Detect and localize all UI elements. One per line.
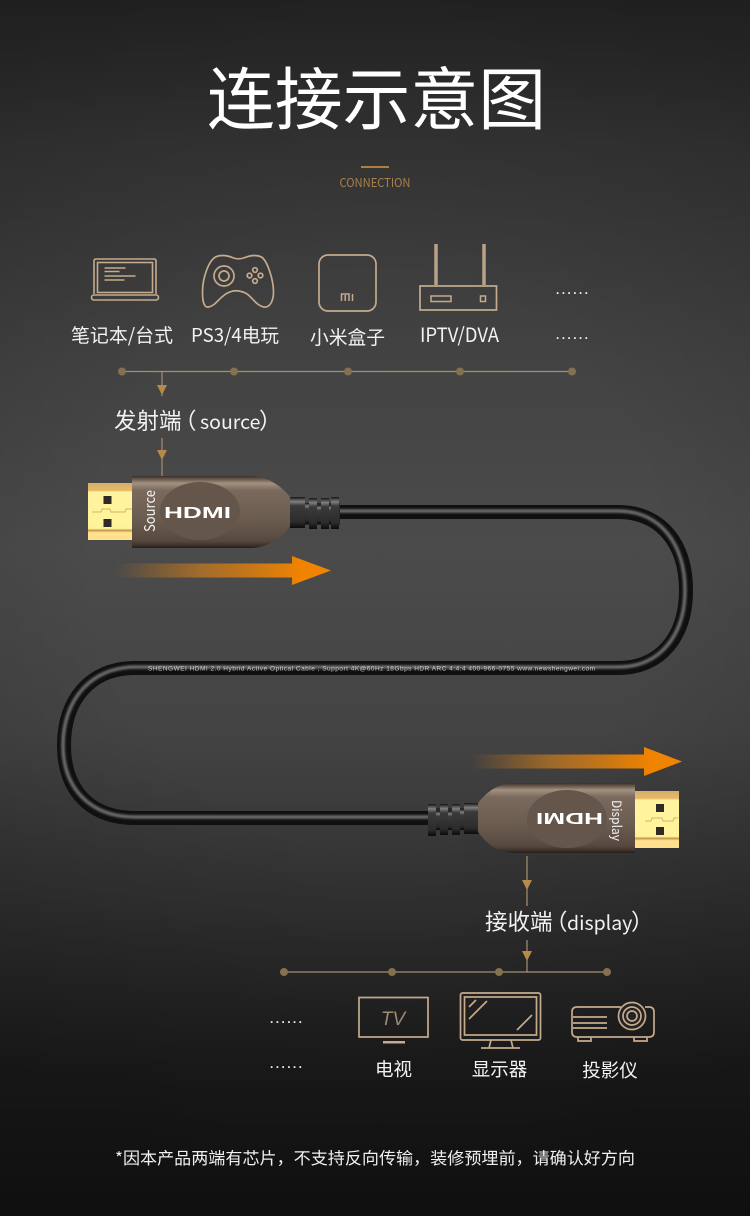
- label: HDMI logo: HDMI: [164, 505, 231, 522]
- icon: monitor: [460, 993, 540, 1048]
- label: Display: Display: [608, 800, 627, 841]
- display HDMI plug: [428, 783, 679, 853]
- label: mi box: 小米盒子: [310, 323, 385, 350]
- label: display: 接收端: [485, 905, 553, 937]
- cable: [63, 511, 686, 818]
- boot: [428, 803, 480, 836]
- icon: TV: [359, 998, 428, 1044]
- label: dots: ......: [556, 328, 588, 342]
- arrow: display direction: [470, 747, 682, 776]
- icon: mi box: [319, 255, 376, 311]
- panel: display devices: [270, 993, 654, 1083]
- title: 连接示意图: [207, 45, 546, 144]
- panel: source devices: [71, 244, 588, 350]
- label: IPTV/DVA: IPTV/DVA: [420, 319, 500, 348]
- icon: game controller: [202, 255, 274, 307]
- subtitle: connection: CONNECTION: [340, 174, 410, 191]
- label: TV: 电视: [375, 1056, 412, 1082]
- display connector line: [280, 856, 611, 976]
- label: source: ）: [259, 404, 282, 436]
- label: dots: ......: [270, 1057, 302, 1071]
- subtitle: connection: [340, 166, 410, 191]
- source connector line: [118, 368, 576, 476]
- label: monitor: 显示器: [472, 1056, 527, 1082]
- gold tip: [88, 483, 132, 540]
- icon: dots: ......: [556, 283, 588, 297]
- label: source: source: [200, 406, 260, 435]
- label: source: 发射端: [114, 404, 182, 436]
- shell: [478, 783, 635, 853]
- arrow: source direction: [115, 556, 331, 585]
- label: display: display: [567, 907, 632, 936]
- icon: IPTV router: [420, 244, 496, 310]
- icon: laptop: [92, 259, 158, 300]
- label: PS3/4: PS3/4电玩: [191, 321, 279, 348]
- boot: [288, 497, 340, 529]
- label: display: （: [545, 905, 568, 937]
- icon: TV: TV: [381, 1009, 407, 1030]
- cable print: SHENGWEI HDMI 2.0 Hybrid Active Optical Cable , Support 4K@60Hz 18Gbps HDR ARC 4:4:4 400-966-0755 www.newshengwei.com: [148, 666, 595, 672]
- icon: projector: [572, 1002, 654, 1041]
- label: laptop: 笔记本/台式: [71, 321, 173, 348]
- label: source: （: [174, 404, 197, 436]
- label: Source: Source: [139, 490, 160, 532]
- shell: [132, 476, 290, 548]
- label: HDMI logo mirrored: HDMI: [536, 809, 603, 826]
- label: display: ）: [631, 905, 654, 937]
- footnote: *因本产品两端有芯片，不支持反向传输，装修预埋前，请确认好方向: [115, 1145, 635, 1169]
- gold tip: [635, 791, 679, 848]
- source HDMI plug: [88, 476, 340, 548]
- label: projector: 投影仪: [582, 1057, 638, 1083]
- icon: dots: ......: [270, 1012, 302, 1026]
